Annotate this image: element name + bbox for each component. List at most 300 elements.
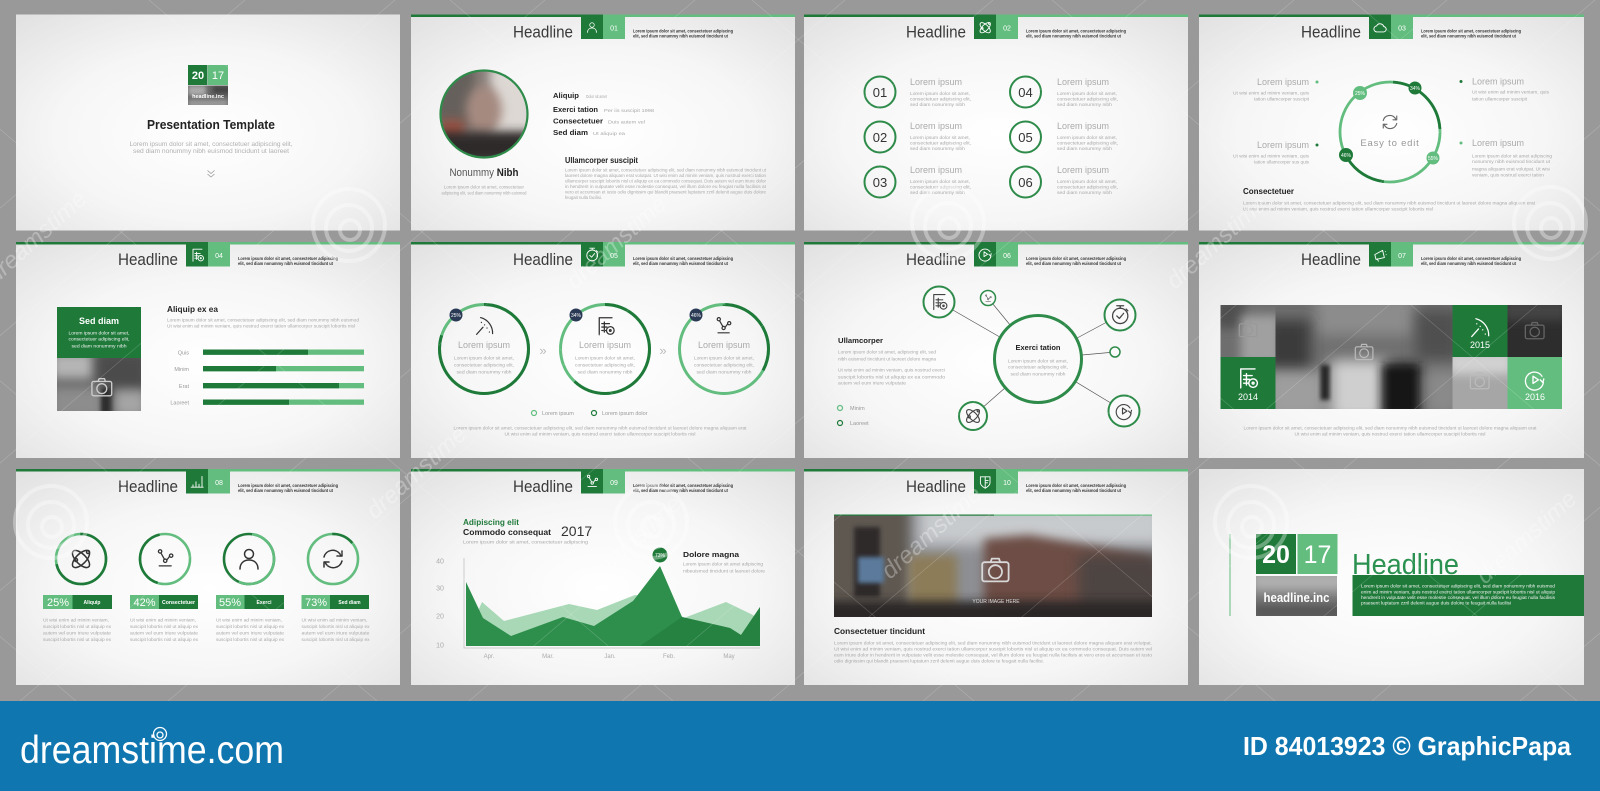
- item 05: [1010, 121, 1118, 152]
- header 09: [411, 469, 795, 496]
- header 08: elit, sed diam nonummy nibh euismod tincidunt ut: [238, 488, 333, 493]
- area chart: Feb.: [663, 654, 675, 660]
- item 06: 06: [1018, 175, 1033, 190]
- header 03: Headline: [1301, 22, 1361, 42]
- header 10: Headline: [906, 477, 966, 496]
- icon: double chevron: [208, 170, 214, 177]
- header 10: [804, 469, 1188, 496]
- callout: dolore magna: Dolore magna: [683, 550, 740, 559]
- item 03: Lorem ipsum dolor sit amet,: [910, 179, 970, 184]
- text block: consectetuer: Consectetuer: [1243, 187, 1294, 196]
- logo block: headline.inc: [1264, 590, 1330, 605]
- header 07: elit, sed diam nonummy nibh euismod tincidunt ut: [1421, 261, 1516, 266]
- text block: ullamcorper: [565, 156, 767, 200]
- callout: dolore magna: nibeuismod tincidunt ut laoreet dolore: [683, 568, 766, 574]
- text block: ullamcorper: laoreet dolore magna aliquam erat volutpat. Ut wisi enim ad minim veniam, quis nostrud exerci tation: [565, 173, 767, 178]
- node: stopwatch: [1104, 300, 1136, 330]
- callout bottom right: [1460, 138, 1553, 178]
- hub circle: [994, 316, 1082, 402]
- slide title: Presentation Template: [147, 117, 275, 132]
- item 06: [1010, 165, 1118, 198]
- header 04: [16, 242, 400, 269]
- detail list: [553, 91, 655, 137]
- subtitle text: sed diam nonummy nibh euismod tincidunt ut laoreet: [133, 149, 289, 155]
- step 3 ring: Lorem ipsum dolor sit amet,: [694, 356, 754, 360]
- ring chart: 46%: [1341, 153, 1352, 159]
- item 02: 02: [873, 130, 887, 145]
- legend: Lorem ipsum: [542, 411, 574, 417]
- text block: ullamcorper: Ullamcorper suscipit: [565, 156, 638, 165]
- item 01: 01: [873, 85, 887, 100]
- green text band: [1352, 575, 1584, 616]
- watermark spirals: [15, 187, 1586, 558]
- name caption: Lorem ipsum dolor sit amet, consectetuer: [444, 184, 525, 190]
- header 06: Headline: [906, 250, 966, 269]
- item 05: Lorem ipsum dolor sit amet,: [1057, 135, 1117, 140]
- tile: 2014: [1220, 357, 1276, 409]
- watermark text: dreamstime: [576, 491, 687, 594]
- watermark text: dreamstime: [876, 481, 987, 584]
- header 10: Lorem ipsum dolor sit amet, consectetuer adipiscing: [1026, 483, 1126, 488]
- metric: 55% exerci: Ut wisi enim ad minim veniam,: [216, 618, 282, 622]
- slide 6: three ring steps: [411, 242, 795, 458]
- text block: ullamcorper: Ut wisi enim ad minim veniam, quis nostrud exerci: [838, 368, 945, 372]
- metric: 42% consectetuer: Consectetuer: [162, 600, 195, 606]
- name caption: [442, 184, 527, 196]
- node: atom: [959, 402, 987, 430]
- item 01: Lorem ipsum: [910, 77, 962, 87]
- chart title block: Adipiscing elit: [463, 518, 519, 527]
- header 02: elit, sed diam nonummy nibh euismod tincidunt ut: [1026, 34, 1121, 38]
- item 04: consectetuer adipiscing elit,: [1057, 96, 1118, 102]
- text block: consectetuer tincidunt: odio dignissim qui blandit praesent luptatum zzril delenit augue duis dolore te feugait nulla facilisi.: [834, 658, 1044, 664]
- photo: blurred building: [824, 505, 1164, 630]
- step 1 ring: sed diam nonummy nibh: [456, 370, 512, 374]
- bar chart: Erat: [179, 384, 189, 390]
- header 01: 01: [610, 26, 618, 32]
- logo block: 20: [192, 70, 204, 82]
- header 05: Lorem ipsum dolor sit amet, consectetuer adipiscing: [633, 256, 733, 261]
- item 01: sed diam nonummy nibh: [910, 102, 966, 107]
- header 01: [411, 14, 795, 42]
- footer text: Lorem ipsum dolor sit amet, consectetuer adipiscing elit, sed diam nonummy nibh euismod tincidunt ut laoreet dolore magna aliquam erat: [1244, 426, 1537, 430]
- metric: 73% sed diam: [302, 534, 370, 642]
- metric: 25% aliquip: autem vel eum iriure vulputate: [43, 630, 112, 636]
- header 06: elit, sed diam nonummy nibh euismod tincidunt ut: [1026, 261, 1121, 266]
- text block: ullamcorper: nibh euismod tincidunt ut laoreet dolore magna: [838, 356, 937, 362]
- metric: 42% consectetuer: [130, 534, 199, 642]
- logo block: [188, 65, 233, 108]
- item 05: sed diam nonummy nibh: [1057, 146, 1113, 151]
- step 2 ring: 34%: [571, 313, 582, 319]
- step 2 ring: consectetuer adipiscing elit,: [575, 362, 635, 368]
- header 06: [804, 242, 1188, 269]
- bar chart: [170, 350, 364, 406]
- item 04: Lorem ipsum: [1057, 77, 1109, 87]
- text block: aliquip ex ea: Aliquip ex ea: [167, 305, 219, 314]
- chart title block: 2017: [561, 523, 592, 539]
- watermark text: dreamstime: [361, 421, 472, 524]
- item 06: Lorem ipsum dolor sit amet,: [1057, 179, 1117, 184]
- header 05: Headline: [513, 250, 573, 269]
- metric: 42% consectetuer: suscipit lobortis nisl ut aliquip ex: [130, 637, 199, 642]
- arrow: step 1 to 2: »: [539, 343, 547, 358]
- area chart: 10: [436, 642, 444, 650]
- header 06: 06: [1003, 253, 1011, 260]
- metric: 73% sed diam: suscipit lobortis nisl ut aliquip ex: [302, 637, 370, 642]
- watermark text: dreamstime: [561, 191, 672, 294]
- callout top right: [1460, 76, 1550, 102]
- callout bottom right: nonummy nibh euismod tincidunt ut: [1472, 159, 1551, 164]
- item 04: 04: [1018, 85, 1033, 100]
- chart title block: [463, 518, 592, 544]
- spokes: [939, 298, 1124, 416]
- header 03: elit, sed diam nonummy nibh euismod tincidunt ut: [1421, 34, 1516, 38]
- text block: consectetuer tincidunt: [834, 627, 1153, 664]
- header 04: 04: [215, 253, 223, 260]
- step 1 ring: Lorem ipsum: [458, 340, 510, 350]
- legend: [838, 406, 869, 427]
- item 03: consectetuer adipiscing elit,: [910, 184, 971, 190]
- logo block: 17: [1304, 541, 1331, 569]
- ring chart: Easy to edit: [1360, 138, 1420, 149]
- item 03: Lorem ipsum: [910, 165, 962, 175]
- header 07: 07: [1398, 253, 1406, 260]
- item 05: Lorem ipsum: [1057, 121, 1109, 131]
- callout bottom left: tation ullamcorper sus quis: [1254, 160, 1310, 164]
- text block: ullamcorper: Ullamcorper: [838, 336, 883, 345]
- area chart: Mar.: [542, 654, 554, 660]
- vertical rule: [1230, 534, 1231, 616]
- slide 5: bar chart: [16, 242, 400, 458]
- callout bottom right: Lorem ipsum dolor sit amet adipiscing: [1472, 154, 1553, 158]
- callout: dolore magna: [683, 550, 766, 574]
- headline: Headline: [1352, 549, 1459, 581]
- step 2 ring: [560, 304, 650, 394]
- callout top left: tation ullamcorper suscipit: [1254, 96, 1310, 102]
- metric: 25% aliquip: suscipit lobortis nisl ut aliquip ex: [43, 624, 112, 629]
- bar chart: Laoreet: [170, 400, 189, 406]
- header 05: elit, sed diam nonummy nibh euismod tincidunt ut: [633, 261, 728, 266]
- footer text: [1244, 426, 1537, 436]
- footer text: Lorem ipsum dolor sit amet, consectetuer adipiscing elit, sed diam nonummy nibh euismod tincidunt ut laoreet dolore magna aliquam erat: [454, 426, 747, 430]
- text block: ullamcorper: feugait nulla facilisi.: [565, 195, 602, 200]
- item 02: [864, 121, 971, 152]
- header 09: Lorem ipsum dolor sit amet, consectetuer adipiscing: [633, 483, 733, 488]
- step 3 ring: Lorem ipsum: [698, 340, 750, 350]
- header 05: [411, 242, 795, 269]
- item 06: consectetuer adipiscing elit,: [1057, 184, 1118, 190]
- header 04: Headline: [118, 250, 178, 269]
- text block: aliquip ex ea: Ut wisi enim ad minim veniam, quis nostrud exerci tation ullamcorper suscipit lobortis nisl: [167, 324, 355, 328]
- logo block: [1251, 534, 1346, 620]
- header 01: Lorem ipsum dolor sit amet, consectetuer adipiscing: [633, 28, 733, 34]
- step 3 ring: [680, 304, 768, 394]
- metric: 55% exerci: suscipit lobortis nisl ut aliquip ex: [216, 637, 285, 642]
- node: play: [1108, 396, 1140, 426]
- footer text: [454, 426, 747, 436]
- header 09: 09: [610, 480, 618, 487]
- metric: 55% exerci: Exerci: [256, 600, 272, 606]
- name caption: adipiscing elit, sed diam nonummy nibh euismod: [442, 190, 527, 196]
- brand wordmark: dreamstime.com: [20, 729, 284, 772]
- slide 3: numbered list: [804, 14, 1188, 230]
- item 04: sed diam nonummy nibh: [1057, 102, 1113, 107]
- panel: sed diam card: Sed diam: [79, 316, 119, 326]
- callout top right: Ut wisi enim ad minim veniam, quis: [1472, 90, 1550, 94]
- header 03: 03: [1398, 26, 1406, 32]
- text block: ullamcorper: in hendrerit in vulputate velit esse molestie consequat, vel illum dolore eu feugiat nulla facilisis at: [565, 184, 767, 189]
- green text band: praesent luptatum zzril delenit augue duis dolore te feugait nulla facilisi: [1361, 600, 1511, 606]
- item 02: Lorem ipsum dolor sit amet,: [910, 135, 970, 140]
- callout top left: Lorem ipsum: [1257, 77, 1309, 87]
- ring chart: 25%: [1355, 91, 1366, 97]
- item 03: sed diam nonummy nibh: [910, 190, 966, 195]
- detail list: Exerci tation: [553, 105, 598, 114]
- area chart: 73%: [655, 553, 666, 559]
- tile: 2016: 2016: [1525, 392, 1545, 402]
- callout bottom left: Ut wisi enim ad minim veniam, quis: [1233, 154, 1310, 158]
- header 03: Lorem ipsum dolor sit amet, consectetuer adipiscing: [1421, 28, 1521, 34]
- panel: sed diam card: consectetuer adipiscing elit,: [68, 336, 130, 342]
- text block: consectetuer: [1243, 187, 1536, 212]
- subtitle text: Lorem ipsum dolor sit amet, consectetuer adipiscing elit,: [130, 142, 293, 148]
- item 02: sed diam nonummy nibh: [910, 146, 966, 151]
- text block: consectetuer tincidunt: Ut wisi enim ad minim veniam, quis nostrud exerci tation ullamcorper suscipit lobortis nisl ut aliquip ex ea commodo consequat. Duis autem vel: [834, 646, 1152, 652]
- slide 8: photo mosaic: [1199, 242, 1584, 458]
- logo block: 17: [212, 70, 224, 82]
- step 1 ring: consectetuer adipiscing elit,: [454, 362, 514, 368]
- callout bottom right: Lorem ipsum: [1472, 138, 1524, 148]
- slide 7: hub and spoke: [804, 242, 1188, 458]
- node: small: [1110, 347, 1120, 357]
- tile: 2014: 2014: [1238, 392, 1258, 402]
- hub circle: Lorem ipsum dolor sit amet,: [1008, 358, 1068, 364]
- callout bottom left: [1233, 140, 1318, 164]
- header 02: 02: [1003, 26, 1011, 32]
- detail list: Dolor sit amet: [586, 94, 608, 99]
- metric: 73% sed diam: 73%: [305, 597, 327, 609]
- step 2 ring: sed diam nonummy nibh: [578, 370, 633, 374]
- metric: 73% sed diam: suscipit lobortis nisl ut aliquip ex: [302, 624, 370, 629]
- footer text: Ut wisi enim ad minim veniam, quis nostrud exerci tation ullamcorper suscipit lobortis nisl: [504, 432, 696, 436]
- header 10: elit, sed diam nonummy nibh euismod tincidunt ut: [1026, 488, 1121, 493]
- green text band: hendrerit in vulputate velit esse molestie consequat, vel illum dolore eu feugiat nulla facilisis: [1361, 595, 1556, 600]
- slide 11: photo feature: [804, 469, 1188, 685]
- footer band: [0, 701, 1600, 791]
- hub circle: consectetuer adipiscing elit,: [1008, 364, 1068, 370]
- header 06: Lorem ipsum dolor sit amet, consectetuer adipiscing: [1026, 256, 1126, 261]
- metric: 42% consectetuer: autem vel eum iriure vulputate: [130, 630, 199, 636]
- step 3 ring: 46%: [691, 313, 702, 319]
- text block: consectetuer: Lorem ipsum dolor sit amet, consectetuer adipiscing elit, sed diam nonummy nibh euismod tincidunt ut laoreet dolore magna aliquam erat: [1243, 200, 1536, 206]
- step 1 ring: [440, 304, 528, 394]
- text block: ullamcorper: Lorem ipsum dolor sit amet, consectetuer adipiscing elit, sed diam nonummy nibh euismod tincidunt ut: [565, 168, 767, 172]
- legend: [532, 410, 648, 417]
- header 04: Lorem ipsum dolor sit amet, consectetuer adipiscing: [238, 256, 338, 261]
- tile: 2015: 2015: [1470, 340, 1490, 350]
- area chart: 40: [436, 558, 444, 566]
- icon: brand spiral: [154, 728, 166, 740]
- header 03: [1199, 14, 1584, 42]
- slide 2: profile: [411, 14, 795, 230]
- tile: 2016: [1508, 357, 1562, 409]
- metric: 55% exerci: [216, 534, 285, 642]
- arrow: step 2 to 3: »: [659, 343, 667, 358]
- hub circle: sed diam nonummy nibh: [1010, 372, 1066, 376]
- subtitle text: [130, 142, 293, 155]
- item 02: Lorem ipsum: [910, 121, 962, 131]
- watermark text: dreamstime: [1161, 191, 1272, 294]
- logo block: 20: [1262, 541, 1290, 569]
- panel: sed diam card: [52, 307, 147, 418]
- photo tile: dark: [1508, 305, 1562, 357]
- item 03: 03: [873, 175, 887, 190]
- detail list: Per iis suscipit 1998: [604, 108, 655, 113]
- chart title block: Lorem ipsum dolor sit amet, consectetuer adipiscing: [463, 540, 589, 544]
- item 04: [1010, 76, 1118, 108]
- step 3 ring: consectetuer adipiscing elit,: [694, 362, 754, 368]
- node: graph: [980, 290, 996, 306]
- item 06: sed diam nonummy nibh: [1057, 190, 1113, 195]
- metric: 25% aliquip: Aliquip: [84, 600, 100, 606]
- bar chart: Minim: [174, 367, 189, 373]
- header 04: elit, sed diam nonummy nibh euismod tincidunt ut: [238, 261, 333, 266]
- callout: dolore magna: Lorem ipsum dolor sit amet adipiscing: [683, 562, 764, 566]
- metric: 25% aliquip: Ut wisi enim ad minim veniam,: [43, 618, 109, 622]
- detail list: Aliquip: [553, 91, 579, 100]
- detail list: Consectetuer: [553, 116, 603, 126]
- area chart: 20: [436, 614, 444, 620]
- callout bottom right: veniam, quis nostrud exerci tation: [1472, 172, 1545, 178]
- ring chart: [1339, 82, 1440, 182]
- text block: aliquip ex ea: Lorem ipsum dolor sit amet, consectetuer adipiscing elit, sed diam nonummy nibh euismod: [167, 318, 360, 322]
- panel: sed diam card: sed diam nonummy nibh: [72, 344, 127, 348]
- step 2 ring: Lorem ipsum: [579, 340, 631, 350]
- slide 1: title slide: [16, 14, 400, 230]
- legend: Laoreet: [850, 421, 869, 427]
- callout top right: tation ullamcorper suscipit: [1472, 96, 1528, 102]
- callout bottom left: Lorem ipsum: [1257, 140, 1309, 150]
- name: Nonummy Nibh: [450, 167, 519, 179]
- callout top left: Ut wisi enim ad minim veniam, quis: [1233, 90, 1310, 96]
- tile: 2015: [1452, 305, 1508, 357]
- metric: 42% consectetuer: suscipit lobortis nisl ut aliquip ex: [130, 624, 199, 629]
- area chart: [436, 548, 760, 660]
- callout top left: [1233, 77, 1318, 102]
- node: list: [924, 286, 954, 318]
- photo tile: center: [1276, 305, 1452, 409]
- header 01: elit, sed diam nonummy nibh euismod tincidunt ut: [633, 34, 728, 38]
- header 09: Headline: [513, 477, 573, 496]
- header 08: 08: [215, 480, 223, 487]
- detail list: Sed diam: [553, 128, 588, 137]
- item 06: Lorem ipsum: [1057, 165, 1109, 175]
- watermark text: dreamstime: [1471, 486, 1582, 589]
- metric: 42% consectetuer: Ut wisi enim ad minim veniam,: [130, 618, 196, 622]
- metric: 42% consectetuer: 42%: [133, 597, 156, 609]
- hub circle: Exerci tation: [1016, 343, 1061, 352]
- detail list: Duis autem vel: [608, 120, 645, 124]
- text block: consectetuer tincidunt: eum iriure dolor in hendrerit in vulputate velit esse molestie consequat, vel illum dolore eu feugiat nulla facilisis at vero eros et accumsan et iusto: [834, 652, 1153, 658]
- text block: ullamcorper: vero et accumsan et iusto odio dignissim qui blandit praesent luptatum zzril delenit augue duis dolore: [565, 190, 767, 194]
- legend: Lorem ipsum dolor: [602, 411, 648, 417]
- item 04: Lorem ipsum dolor sit amet,: [1057, 91, 1117, 96]
- text block: ullamcorper: ullamcorper suscipit lobortis nisl ut aliquip ex ea commodo consequat. Duis autem vel eum iriure dolor: [565, 178, 767, 184]
- header 07: Lorem ipsum dolor sit amet, consectetuer adipiscing: [1421, 256, 1521, 261]
- metric: 25% aliquip: suscipit lobortis nisl ut aliquip ex: [43, 637, 112, 642]
- header 07: [1199, 242, 1584, 269]
- header 08: [16, 469, 400, 496]
- metric: 73% sed diam: Sed diam: [338, 600, 361, 606]
- image id credit: ID 84013923 © GraphicPapa: [1243, 731, 1572, 761]
- logo block: headline.inc: [192, 94, 224, 100]
- text block: consectetuer: Ut wisi enim ad minim veniam, quis nostrud exerci tation ullamcorper suscipit lobortis nisl: [1243, 206, 1433, 212]
- step 2 ring: Lorem ipsum dolor sit amet,: [575, 356, 635, 360]
- footer text: Ut wisi enim ad minim veniam, quis nostrud exerci tation ullamcorper suscipit lobortis nisl: [1294, 432, 1486, 436]
- text block: consectetuer tincidunt: Lorem ipsum dolor sit amet, consectetuer adipiscing elit, sed diam nonummy nibh euismod tincidunt ut laoreet dolore magna aliquam erat volutpat.: [834, 640, 1152, 646]
- metric: 25% aliquip: 25%: [47, 597, 69, 609]
- text block: ullamcorper: Lorem ipsum dolor sit amet, adipiscing elit, sed: [838, 350, 937, 354]
- metric: 55% exerci: suscipit lobortis nisl ut aliquip ex: [216, 624, 285, 629]
- ring chart: 55%: [1428, 156, 1439, 162]
- header 08: Headline: [118, 477, 178, 496]
- icon: refresh: [1383, 115, 1397, 129]
- header 02: Lorem ipsum dolor sit amet, consectetuer adipiscing: [1026, 28, 1126, 34]
- step 3 ring: sed diam nonummy nibh: [696, 370, 752, 374]
- callout top right: Lorem ipsum: [1472, 76, 1524, 86]
- header 02: [804, 14, 1188, 42]
- detail list: Ut aliquip ea: [593, 131, 626, 136]
- area chart: May: [723, 654, 735, 660]
- text block: consectetuer tincidunt: Consectetuer tincidunt: [834, 627, 925, 636]
- text block: ullamcorper: suscipit lobortis nisl ut aliquip ex ea commodo: [838, 374, 946, 380]
- green text band: Lorem ipsum dolor sit amet, consectetuer adipiscing elit, sed diam nonummy nibh euismod: [1361, 584, 1555, 588]
- header 07: Headline: [1301, 250, 1361, 269]
- bar chart: Quis: [178, 350, 189, 356]
- slide 4: cycle diagram: [1199, 14, 1584, 230]
- text block: ullamcorper: [838, 336, 946, 386]
- header 09: elit, sed diam nonummy nibh euismod tincidunt ut: [633, 488, 728, 493]
- callout bottom right: magna aliquam erat volutpat. Ut wisi: [1472, 166, 1550, 172]
- item 02: consectetuer adipiscing elit,: [910, 140, 971, 146]
- item 01: [864, 76, 971, 108]
- area chart: Apr.: [484, 654, 495, 660]
- metric: 55% exerci: autem vel eum iriure vulputate: [216, 630, 285, 636]
- chart title block: Commodo consequat: [463, 528, 551, 537]
- ring chart: 34%: [1410, 86, 1421, 92]
- slide 9: four progress rings: [16, 469, 400, 685]
- text block: aliquip ex ea: [167, 305, 360, 328]
- photo tile: light: [1452, 357, 1508, 409]
- header 08: Lorem ipsum dolor sit amet, consectetuer adipiscing: [238, 483, 338, 488]
- metric: 25% aliquip: [43, 534, 112, 642]
- step 1 ring: 25%: [451, 313, 462, 319]
- slide 10: area chart: [411, 469, 795, 685]
- metric: 55% exerci: 55%: [219, 597, 241, 609]
- header 02: Headline: [906, 22, 966, 42]
- header 01: Headline: [513, 22, 573, 42]
- item 01: Lorem ipsum dolor sit amet,: [910, 91, 970, 96]
- item 05: consectetuer adipiscing elit,: [1057, 140, 1118, 146]
- step 1 ring: Lorem ipsum dolor sit amet,: [454, 356, 514, 360]
- photo tile: top left: [1220, 305, 1276, 357]
- panel: sed diam card: Lorem ipsum dolor sit amet,: [68, 330, 130, 336]
- item 01: consectetuer adipiscing elit,: [910, 96, 971, 102]
- area chart: 30: [436, 586, 444, 592]
- profile photo: [439, 69, 529, 159]
- slide 12: closing: [1199, 469, 1584, 685]
